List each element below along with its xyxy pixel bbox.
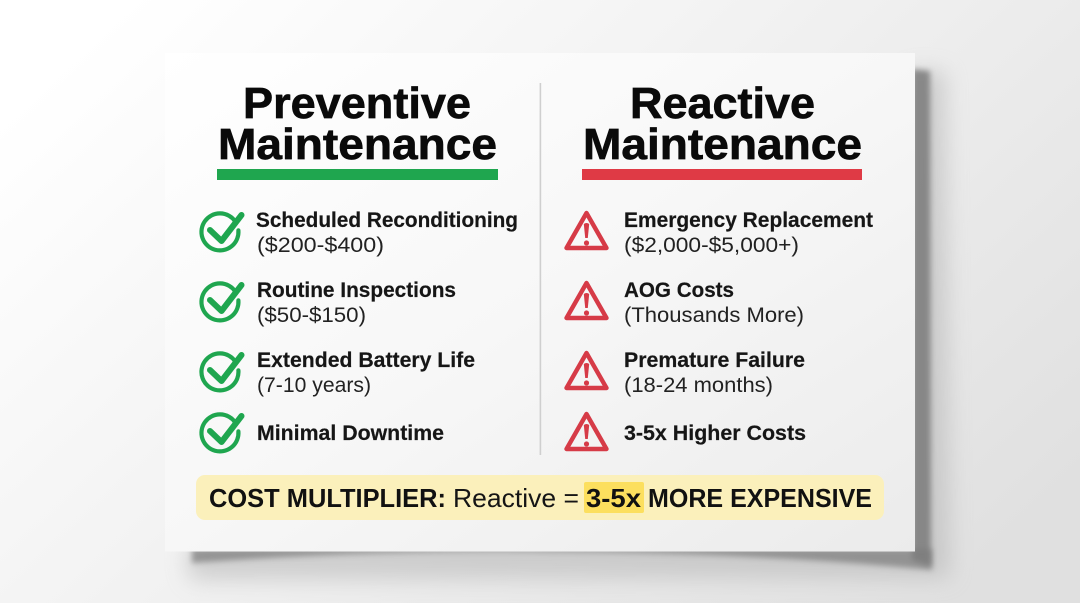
item: minimal downtime: Minimal Downtime (257, 421, 444, 445)
callout: cost multiplier (196, 475, 884, 520)
item: aog costs: AOG Costs (624, 278, 734, 302)
callout: cost multiplier: COST MULTIPLIER: (209, 483, 446, 513)
callout: cost multiplier: MORE EXPENSIVE (648, 483, 872, 513)
item: scheduled reconditioning (201, 208, 518, 257)
item: higher costs: 3-5x Higher Costs (624, 421, 806, 445)
panel: reactive maintenance (566, 79, 873, 449)
callout: cost multiplier: 3-5x (586, 483, 642, 513)
item: emergency replacement (566, 208, 873, 257)
item: scheduled reconditioning: ($200-$400) (257, 233, 384, 257)
item: minimal downtime (201, 414, 444, 451)
item: emergency replacement: ($2,000-$5,000+) (624, 233, 799, 257)
item: routine inspections (201, 278, 456, 327)
item: extended battery life: (7-10 years) (257, 373, 371, 397)
item: premature failure: (18-24 months) (624, 373, 773, 397)
item: emergency replacement: Emergency Replacement (624, 208, 873, 232)
heading: preventive: Preventive (243, 79, 471, 128)
divider (540, 83, 541, 455)
item: aog costs (566, 278, 804, 327)
card shadow (186, 69, 950, 580)
item: routine inspections: Routine Inspections (257, 278, 456, 302)
item: premature failure (566, 348, 805, 397)
callout: cost multiplier: Reactive = (453, 483, 579, 513)
item: higher costs (566, 414, 806, 449)
heading: reactive: Maintenance (583, 120, 862, 169)
item: scheduled reconditioning: Scheduled Reconditioning (256, 208, 518, 232)
item: premature failure: Premature Failure (624, 348, 805, 372)
green underline (217, 169, 498, 180)
item: routine inspections: ($50-$150) (257, 303, 366, 327)
item: extended battery life (201, 348, 475, 397)
panel: comparison card (165, 53, 915, 552)
heading: reactive: Reactive (630, 79, 815, 128)
heading: reactive (583, 79, 862, 169)
item: aog costs: (Thousands More) (624, 303, 804, 327)
item: extended battery life: Extended Battery Life (257, 348, 475, 372)
red underline (582, 169, 862, 180)
heading: preventive: Maintenance (218, 120, 497, 169)
heading: preventive (218, 79, 497, 169)
panel: preventive maintenance (201, 79, 518, 451)
